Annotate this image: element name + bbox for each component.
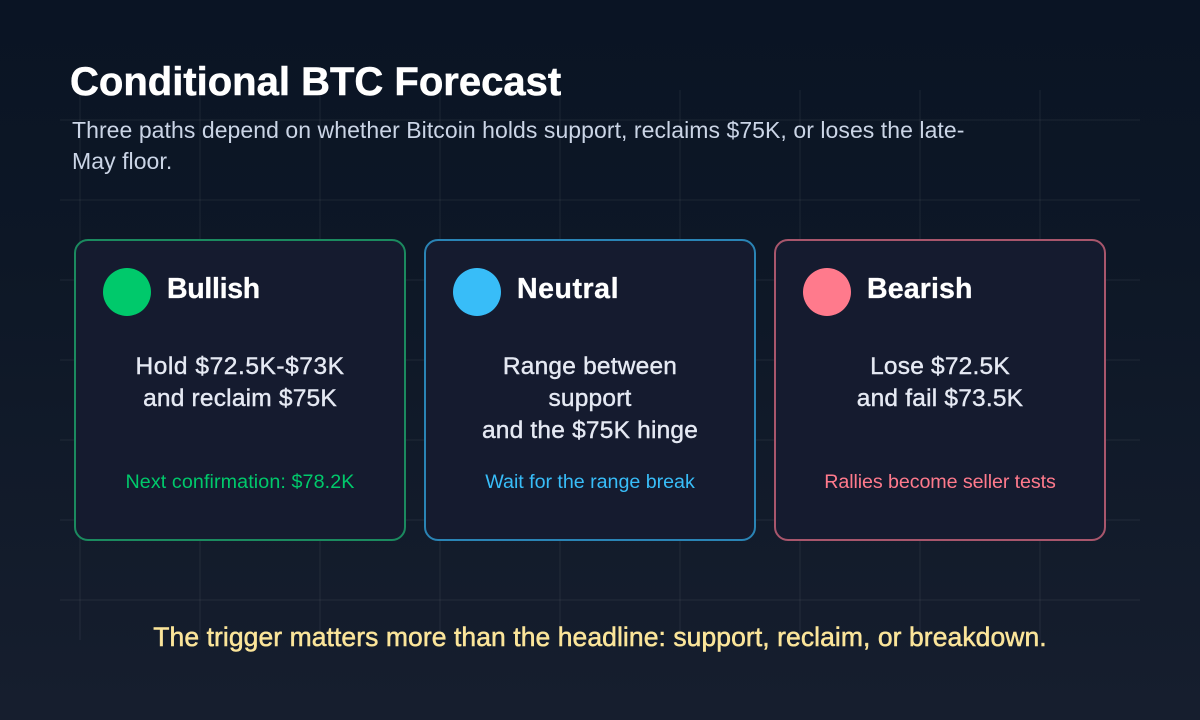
neutral heading: Neutral [517, 273, 619, 305]
neutral condition [482, 353, 698, 444]
bullish note: Next confirmation: $78.2K [125, 471, 355, 493]
subtitle: Three paths depend on whether Bitcoin holds support, reclaims $75K, or loses the late- [72, 117, 964, 143]
bullish condition: and reclaim $75K [143, 385, 337, 412]
panel: bullish [74, 239, 406, 541]
icon: bearish dot [803, 268, 851, 316]
neutral condition: Range between [503, 353, 677, 380]
bullish condition [135, 353, 345, 412]
subtitle [72, 117, 964, 174]
bearish condition: and fail $73.5K [857, 385, 1023, 412]
bearish note: Rallies become seller tests [824, 471, 1056, 493]
neutral note: Wait for the range break [485, 471, 695, 493]
neutral condition: and the $75K hinge [482, 417, 698, 444]
icon: bullish dot [103, 268, 151, 316]
bearish heading: Bearish [867, 273, 973, 305]
title: Conditional BTC Forecast [70, 60, 561, 104]
panel: bearish [774, 239, 1106, 541]
bullish condition: Hold $72.5K-$73K [135, 353, 345, 380]
panel: neutral [424, 239, 756, 541]
bearish condition: Lose $72.5K [870, 353, 1010, 380]
icon: neutral dot [453, 268, 501, 316]
bullish heading: Bullish [167, 273, 260, 305]
bearish condition [857, 353, 1024, 412]
subtitle: May floor. [72, 148, 172, 174]
neutral condition: support [548, 385, 632, 412]
takeaway: The trigger matters more than the headline: support, reclaim, or breakdown. [153, 622, 1047, 652]
